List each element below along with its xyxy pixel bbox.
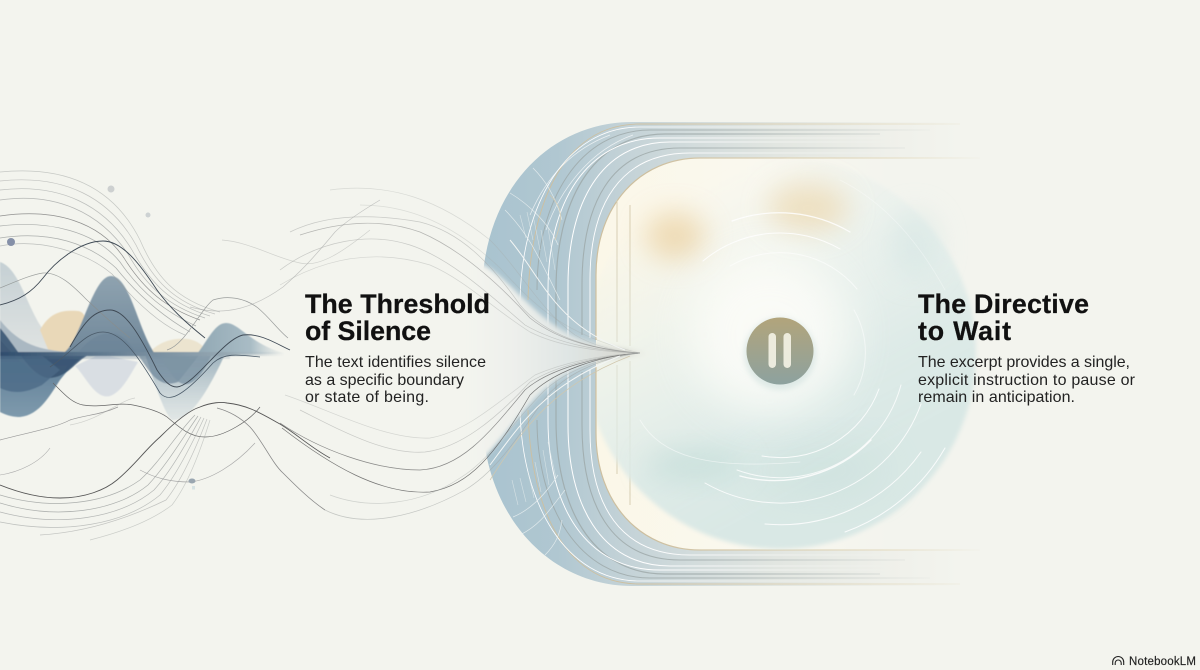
description line 3: or state of being. bbox=[305, 389, 429, 406]
converging funnel bbox=[466, 258, 690, 474]
pause button bbox=[744, 318, 816, 390]
notebooklm logo bbox=[1113, 656, 1196, 668]
warm glow top bbox=[768, 184, 848, 232]
bottom line family bbox=[0, 398, 210, 540]
portal: curved blue band bbox=[482, 122, 1000, 586]
heading line 2: of Silence bbox=[305, 316, 431, 346]
description line 2: as a specific boundary bbox=[305, 372, 464, 389]
teal disc bbox=[597, 213, 977, 550]
dots bbox=[7, 186, 196, 490]
dark wave lines bbox=[0, 241, 330, 510]
heading line 2: to Wait bbox=[918, 316, 1011, 346]
top line family bbox=[0, 171, 380, 338]
text block: the threshold of silence bbox=[305, 289, 490, 406]
description: The text identifies silence bbox=[305, 354, 486, 371]
connecting lines between the waveform and the portal bbox=[280, 188, 640, 519]
white glow centre bbox=[690, 255, 850, 415]
vertical tan lines bbox=[617, 200, 630, 505]
description: The excerpt provides a single, bbox=[918, 354, 1130, 371]
light disc with ripples bbox=[584, 157, 976, 549]
logo text: NotebookLM bbox=[1129, 656, 1196, 668]
band arcs bbox=[505, 124, 960, 584]
teal glow lower right bbox=[750, 446, 890, 494]
text block: the directive to wait bbox=[918, 289, 1136, 406]
inner panel edge bbox=[596, 158, 980, 550]
heading: The Threshold bbox=[305, 289, 490, 319]
warm glow top left bbox=[645, 212, 705, 260]
wave shapes bbox=[0, 262, 288, 420]
description line 2: explicit instruction to pause or bbox=[918, 372, 1136, 389]
inner panel bbox=[596, 158, 1000, 550]
description line 3: remain in anticipation. bbox=[918, 389, 1075, 406]
teal glow upper right bbox=[891, 211, 939, 279]
band fill bbox=[482, 122, 960, 586]
icon: logo arcs bbox=[1113, 656, 1124, 665]
ripple arcs bbox=[640, 180, 945, 532]
soft wave: left waveform bbox=[0, 171, 380, 540]
teal glow lower left bbox=[645, 449, 745, 481]
heading: The Directive bbox=[918, 289, 1089, 319]
